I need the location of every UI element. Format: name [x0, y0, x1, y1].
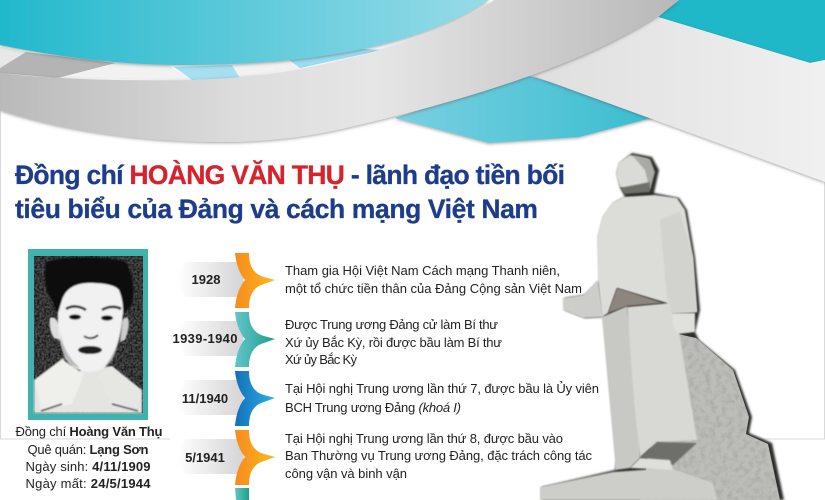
portrait caption: Đồng chí Hoàng Văn Thụ: [16, 424, 163, 439]
entry: 1939-1940: 1939-1940: [172, 331, 238, 346]
entry: 5/1941: Ban Thường vụ Trung ương Đảng, đặc trách công tác: [285, 448, 592, 463]
portrait caption: Ngày mất: 24/5/1944: [26, 476, 151, 491]
entry: 5/1941: công vận và binh vận: [285, 466, 407, 481]
entry: 11/1940: [177, 371, 599, 426]
entry: 5/1941: 5/1941: [185, 450, 225, 465]
header ribbon graphic: [0, 0, 825, 182]
entry: 1928: [177, 253, 582, 308]
title: [15, 160, 565, 224]
entry: 1939-1940: Xứ ủy Bắc Kỳ, rồi được bầu làm Bí thư: [285, 335, 502, 350]
entry: 5/1941: [177, 430, 592, 485]
next entry connector: [235, 488, 249, 500]
portrait caption: Quê quán: Lạng Sơn: [28, 442, 149, 457]
entry: 1928: một tổ chức tiền thân của Đảng Cộng sản Việt Nam: [285, 281, 582, 296]
right sleeve: [660, 212, 697, 313]
entry: 11/1940: Tại Hội nghị Trung ương lần thứ 7, được bầu là Ủy viên: [285, 381, 599, 396]
entry: 5/1941: Tại Hội nghị Trung ương lần thứ 8, được bầu vào: [285, 431, 563, 446]
fist: [672, 313, 695, 334]
page frame lines: [0, 110, 824, 439]
title: tiêu biểu của Đảng và cách mạng Việt Nam: [15, 194, 538, 224]
left trouser leg: [602, 306, 640, 470]
plinth: [540, 468, 717, 500]
rock: [640, 334, 780, 500]
entry: 1939-1940: Được Trung ương Đảng cử làm Bí thư: [285, 317, 498, 332]
entry: 1939-1940: Xứ ủy Bắc Kỳ: [285, 352, 358, 367]
statue: [540, 153, 784, 500]
entry: 1939-1940: [172, 312, 502, 367]
shadow under trouser: [640, 442, 697, 465]
entry: 11/1940: 11/1940: [182, 391, 228, 406]
entry: 1928: 1928: [192, 272, 220, 287]
entry: 1928: Tham gia Hội Việt Nam Cách mạng Thanh niên,: [285, 263, 560, 278]
right trouser leg: [627, 303, 697, 458]
head: [616, 155, 652, 190]
jacket: [597, 195, 697, 317]
portrait photo: [28, 249, 148, 420]
timeline: [172, 253, 599, 500]
lowered hand: [563, 280, 603, 318]
portrait caption: Ngày sinh: 4/11/1909: [26, 459, 150, 474]
entry: 11/1940: BCH Trung ương Đảng (khoá I): [285, 400, 461, 415]
title: Đồng chí HOÀNG VĂN THỤ - lãnh đạo tiền bối: [15, 160, 565, 190]
shoe: [630, 458, 673, 470]
portrait caption: [16, 424, 163, 491]
jacket hem shadow: [608, 288, 663, 313]
